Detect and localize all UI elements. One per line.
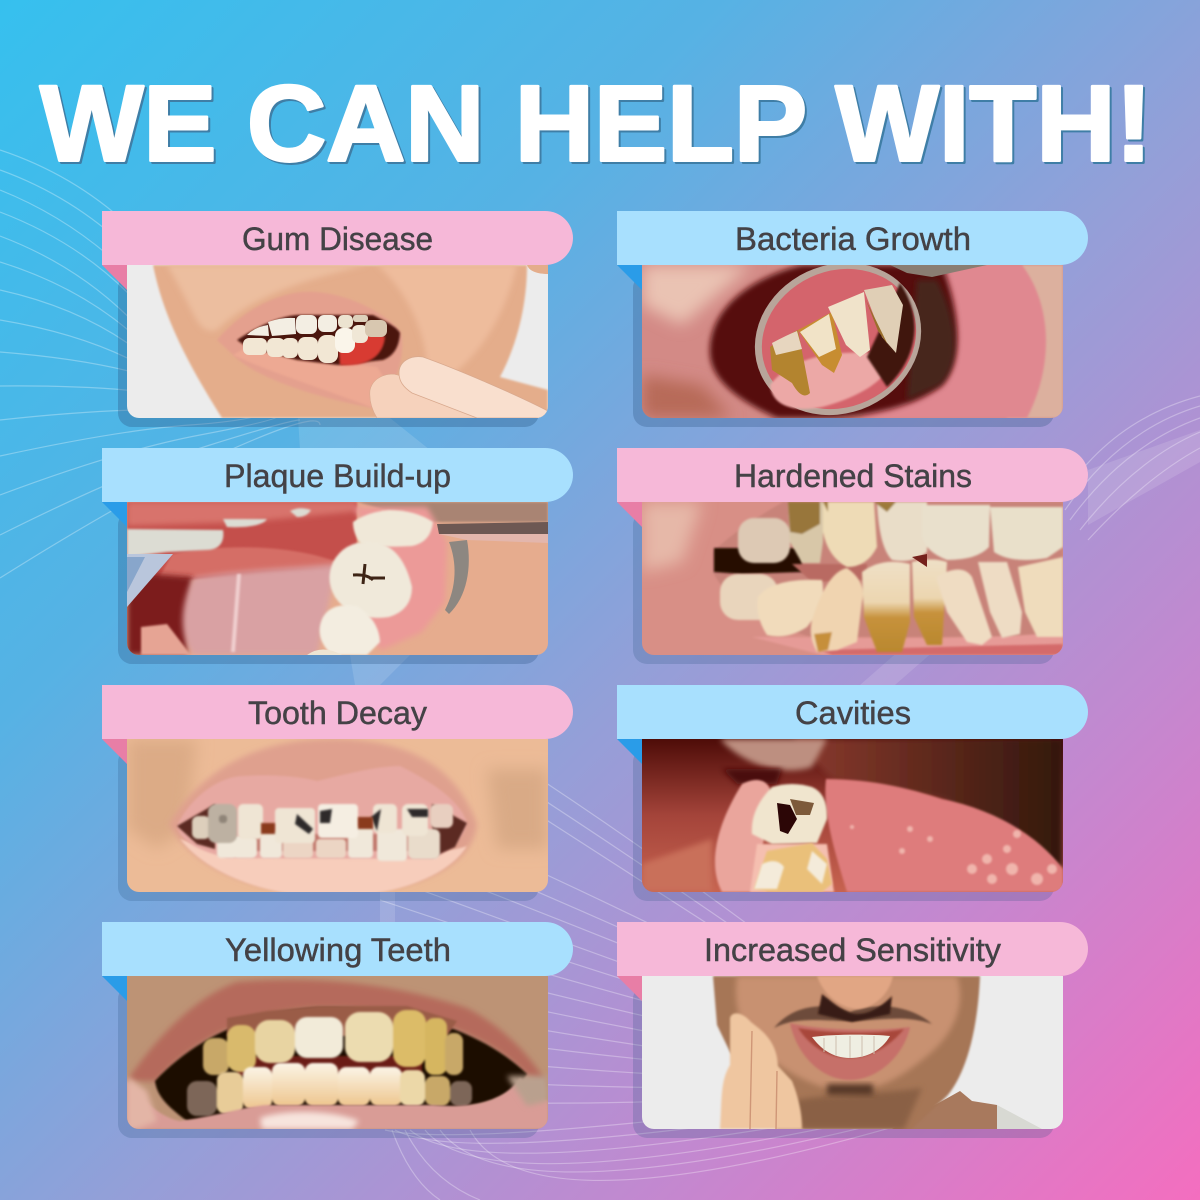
palate [127,502,357,582]
nose [817,976,893,1009]
panel: Yellowing Teeth [102,922,573,1138]
panel: Hardened Stains [617,448,1088,664]
label banner [617,922,1088,976]
mirror ring [445,540,469,614]
photo: tooth with cavity [642,739,1063,892]
molars [353,510,433,547]
label banner [102,448,573,502]
mirror handle [890,265,987,277]
decay patches [219,809,428,834]
shirt and neck [997,1105,1042,1129]
label banner [617,448,1088,502]
panel: Gum Disease: Gum Disease [242,221,433,257]
photo: gum disease [127,265,548,418]
upper teeth [247,315,368,336]
lower teeth [720,557,1063,652]
title: WE CAN HELP WITH! [42,64,1154,186]
moustache [774,1006,932,1028]
label banner [617,685,1088,739]
mouth [790,1023,910,1080]
white teeth [127,508,311,557]
teeth with tartar [770,330,810,395]
dark throat [127,572,193,655]
decorative light facets [298,418,1200,922]
panel: Yellowing Teeth: Yellowing Teeth [225,932,451,968]
hand on cheek [720,1013,802,1129]
upper teeth [738,502,1063,567]
lower teeth [243,320,387,363]
label banner [102,685,573,739]
panel: Increased Sensitivity [617,922,1088,1138]
photo: molar with plaque [127,502,548,655]
panel: Bacteria Growth [617,211,1088,442]
upper lip [127,980,548,1086]
upper right dark area [792,739,1063,869]
panel: Tooth Decay [102,685,573,901]
label banner [617,211,1088,265]
mouth opening [177,766,467,859]
label banner [102,211,573,265]
face [713,976,980,1129]
mouth [155,1008,527,1121]
panel: Tooth Decay: Tooth Decay [248,695,427,731]
lips [172,739,478,876]
gums inside mirror [770,353,892,409]
decayed upper teeth [192,804,453,843]
gum [715,780,772,892]
photo: yellow teeth [127,976,548,1129]
gums [352,507,447,650]
tongue [825,779,1063,892]
beard [792,1088,922,1129]
photo: man holding his cheek [642,976,1063,1129]
mouth interior [713,502,1063,637]
label banner [102,922,573,976]
panel: Increased Sensitivity: Increased Sensitivity [704,932,1001,968]
upper yellow teeth [203,1010,463,1075]
lower teeth [187,1063,472,1116]
lower teeth [217,826,440,861]
tongue speckles [850,825,1057,885]
panel: Cavities [617,685,1088,901]
dental tool [437,522,548,534]
photo: child's decayed teeth [127,739,548,897]
lower lip [127,1078,548,1129]
mouth cavity [710,265,957,418]
nostrils [818,994,892,1022]
mouth [237,315,400,365]
lips [217,292,402,408]
tongue [183,564,337,655]
molar [752,784,827,844]
panel: Hardened Stains: Hardened Stains [734,458,972,494]
fingers [370,374,548,418]
panel: Gum Disease [102,211,573,427]
photo: stained teeth [642,502,1063,655]
panel: Cavities: Cavities [795,695,911,731]
title: WE CAN HELP WITH! [40,62,1152,184]
blurred upper teeth [720,739,827,770]
blue paper [127,554,173,607]
mirror rim [754,265,922,416]
panel: Plaque Build-up [102,448,573,664]
panel: Bacteria Growth: Bacteria Growth [735,221,971,257]
photo: dental mirror with tartar [642,265,1063,418]
panel: Plaque Build-up: Plaque Build-up [224,458,451,494]
